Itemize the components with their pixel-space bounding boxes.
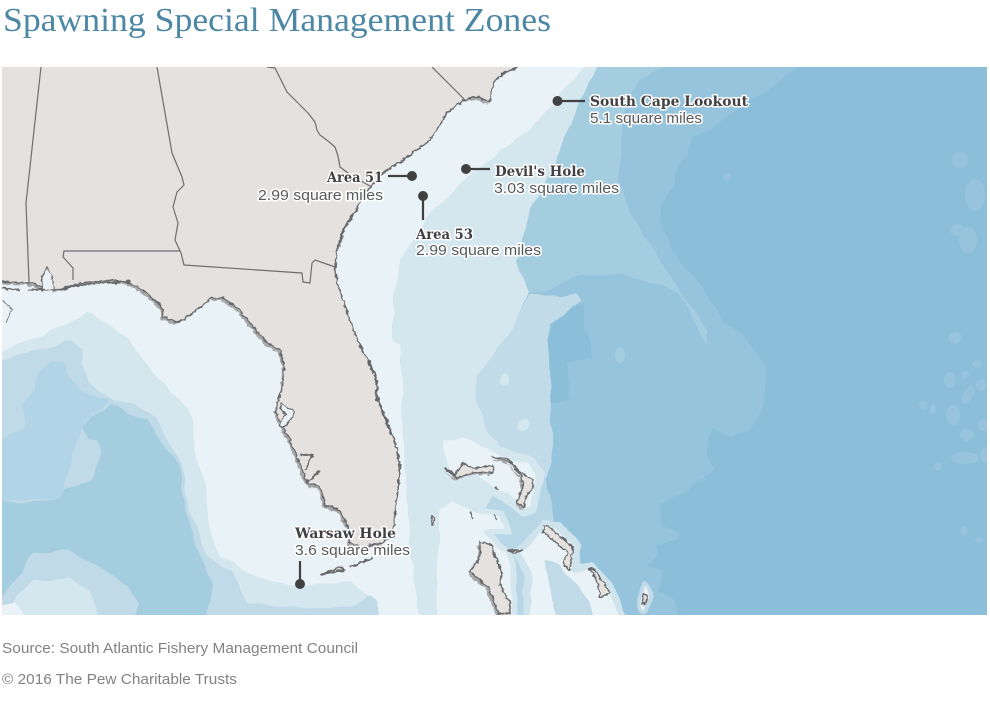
label: Area 51: Area 51 [326,170,383,186]
ocean: continental shelf slope [0,57,602,625]
ocean: blake plateau [470,292,581,480]
land and coast [0,57,648,616]
ocean: providence channels [486,479,554,615]
label: Devil's Hole: 3.03 square miles [494,180,619,197]
label: South Cape Lookout: South Cape Lookout [590,94,749,110]
label: Warsaw Hole: 3.6 square miles [295,542,410,559]
title: Spawning Special Management Zones [3,2,551,39]
label: South Cape Lookout: 5.1 square miles [590,110,702,127]
label: Warsaw Hole: Warsaw Hole [294,526,396,542]
islands: bahamas and florida keys [320,457,648,613]
land: southeast united states and florida [0,57,517,547]
ocean: shallow shelf [0,57,592,625]
marker: South Cape Lookout [552,96,585,106]
label: Devil's Hole [494,164,619,197]
label: Area 53 [415,227,541,259]
label: Devil's Hole: Devil's Hole [495,164,585,180]
ocean: deep notch [548,303,593,403]
label: Area 53: Area 53 [415,227,473,243]
land: coastal barrier detail [2,160,403,483]
ocean: deepest water [648,67,987,615]
marker: Devil's Hole [461,164,490,174]
label: Warsaw Hole [294,526,410,559]
label: Area 53: 2.99 square miles [416,242,541,259]
label: South Cape Lookout [590,94,749,127]
tampa bay [279,403,295,428]
ocean: all depth contours [0,57,808,630]
label: Area 51: 2.99 square miles [258,187,383,204]
marker: Warsaw Hole [295,561,305,589]
source note: Source: South Atlantic Fishery Management Council [2,640,358,657]
label: Area 51 [258,170,383,204]
ocean: bahamas banks [435,433,651,630]
mobile bay [42,267,54,290]
land shadow [0,60,531,616]
copyright note: © 2016 The Pew Charitable Trusts [2,671,237,688]
ocean: mid slope [516,67,708,344]
ocean: gulf slope [0,342,378,625]
state borders [26,67,465,283]
marker: Area 53 [418,191,428,220]
ocean: atlantic slope [522,67,796,615]
marker: Area 51 [388,171,417,181]
ocean: abyssal rises [615,152,990,543]
